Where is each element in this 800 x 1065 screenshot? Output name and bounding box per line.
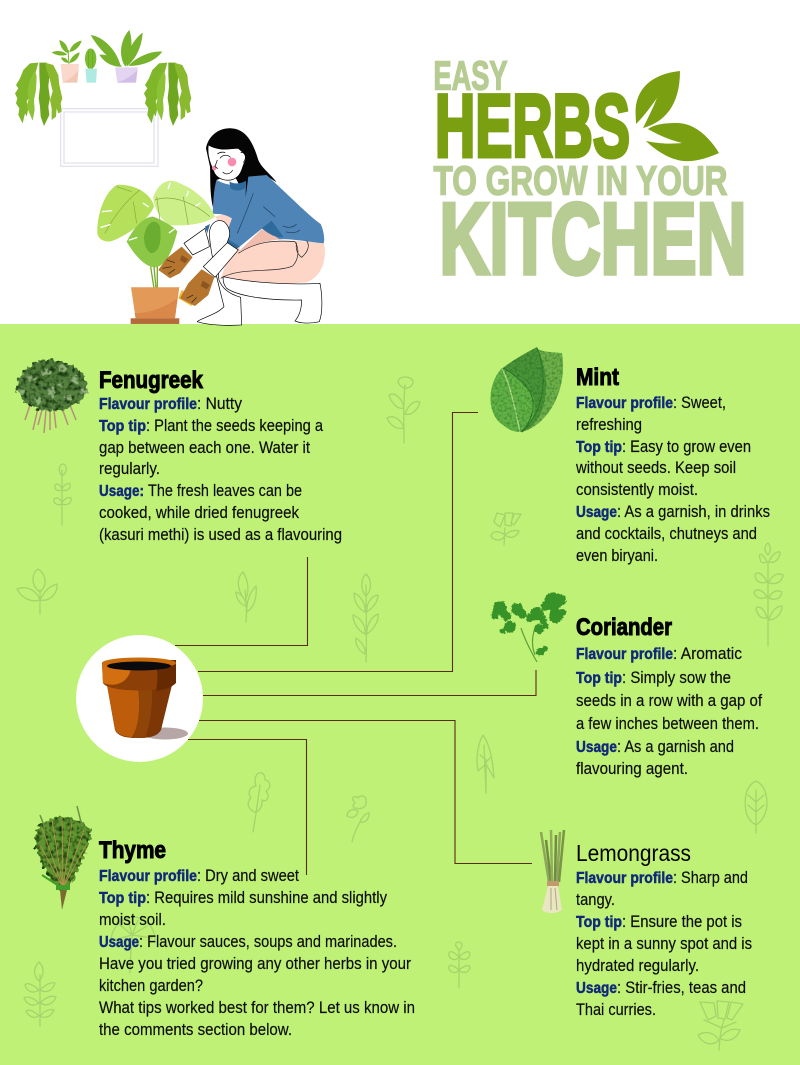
background plant doodles	[17, 377, 783, 1050]
text block: lemongrass: hydrated regularly.	[576, 957, 699, 975]
title	[434, 52, 746, 296]
text block: thyme and closing question: Top tip	[99, 890, 146, 907]
text block: fenugreek: Top tip	[99, 418, 146, 435]
text block: fenugreek: regularly.	[99, 460, 160, 478]
text block: thyme and closing question: : Flavour sauces, soups and marinades.	[139, 933, 397, 951]
text block: lemongrass: : Sharp and	[673, 869, 748, 887]
text block: coriander: flavouring agent.	[576, 760, 688, 778]
illustration: wall shelf, plants and gardening woman	[15, 30, 325, 325]
text block: lemongrass: Usage	[576, 980, 617, 997]
text block: mint: Flavour profile	[576, 395, 673, 412]
text block: thyme and closing question: : Requires mild sunshine and slightly	[146, 889, 388, 907]
text block: mint: refreshing	[576, 416, 642, 434]
woman: trouser outlines	[221, 241, 308, 278]
text block: lemongrass	[576, 840, 752, 1019]
hanging plant left	[15, 63, 62, 126]
text block: coriander: seeds in a row with a gap of	[576, 692, 762, 710]
text block: mint: without seeds. Keep soil	[575, 459, 736, 477]
icon: title leaves	[636, 71, 719, 161]
heading: coriander: Coriander	[576, 614, 672, 641]
text block: lemongrass: tangy.	[576, 891, 615, 909]
text block: thyme and closing question: Usage	[99, 934, 139, 951]
text block: lemongrass: : Stir-fries, teas and	[617, 979, 746, 997]
text block: lemongrass: kept in a sunny spot and is	[576, 935, 752, 953]
text block: coriander: : As a garnish and	[617, 738, 734, 756]
wall frame	[61, 109, 158, 166]
cactus in teal pot	[85, 48, 97, 83]
text block: lemongrass: Flavour profile	[576, 870, 673, 887]
heading: lemongrass: Lemongrass	[576, 840, 691, 866]
text block: coriander: Flavour profile	[576, 646, 673, 663]
text block: fenugreek: The fresh leaves can be	[148, 482, 302, 500]
herb image: coriander	[491, 593, 566, 662]
woman: pink clothing	[215, 214, 325, 284]
text block: thyme and closing question: kitchen garden?	[99, 977, 203, 995]
herb image: mint	[490, 347, 563, 432]
woman: legs	[184, 221, 322, 325]
small potted plant	[52, 40, 82, 83]
text block: mint: and cocktails, chutneys and	[576, 525, 757, 543]
text block: fenugreek	[99, 367, 342, 544]
text block: fenugreek: Flavour profile	[99, 396, 197, 413]
woman: hair	[206, 128, 277, 208]
text block: mint	[575, 364, 770, 565]
text block: coriander	[576, 614, 762, 778]
woman: facial features	[215, 152, 245, 174]
text block: lemongrass: Thai curries.	[576, 1001, 656, 1019]
text block: mint: : Sweet,	[673, 394, 726, 412]
text block: thyme and closing question	[99, 837, 415, 1039]
text block: mint: consistently moist.	[576, 481, 698, 499]
text block: thyme and closing question: : Dry and sweet	[197, 867, 299, 885]
text block: coriander: a few inches between them.	[576, 715, 759, 733]
text block: thyme and closing question: Have you tried growing any other herbs in your	[99, 955, 411, 973]
woman: sweater shadow and folds	[237, 193, 300, 237]
text block: thyme and closing question: What tips worked best for them? Let us know in	[99, 999, 415, 1017]
text block: mint: even biryani.	[576, 547, 658, 565]
heading: mint: Mint	[576, 364, 619, 391]
title: herbs: HERBS	[435, 76, 630, 176]
text block: fenugreek: gap between each one. Water it	[99, 439, 310, 457]
text block: mint: Top tip	[576, 439, 622, 456]
text block: fenugreek: : Plant the seeds keeping a	[146, 417, 324, 435]
herb image: thyme	[35, 806, 92, 910]
text block: thyme and closing question: the comments section below.	[99, 1021, 292, 1039]
woman: face	[208, 145, 246, 180]
text block: coriander: : Simply sow the	[622, 669, 731, 687]
heading: fenugreek: Fenugreek	[99, 367, 204, 394]
panel: green background	[0, 324, 800, 1065]
central pot in white circle	[76, 635, 203, 762]
text block: fenugreek: : Nutty	[197, 395, 243, 413]
text block: mint: Usage	[576, 504, 617, 521]
text block: mint: : Easy to grow even	[622, 438, 751, 456]
title: easy: EASY	[434, 52, 508, 98]
connector lines	[175, 412, 536, 875]
terracotta plant pot	[131, 287, 179, 324]
text block: fenugreek: Usage:	[99, 483, 144, 500]
text block: thyme and closing question: Flavour profile	[99, 868, 197, 885]
text block: coriander: Top tip	[576, 670, 622, 687]
hanging plant right	[144, 63, 191, 126]
woman: pink shadow	[239, 229, 284, 252]
text block: lemongrass: : Ensure the pot is	[622, 913, 742, 931]
woman: cheeks	[212, 158, 236, 170]
herb image: fenugreek	[17, 359, 88, 433]
text block: lemongrass: Top tip	[576, 914, 622, 931]
woman: sweater	[213, 175, 324, 249]
woman: collar and cuffs	[205, 181, 246, 250]
heading: thyme: Thyme	[99, 837, 166, 864]
herb image: lemongrass	[541, 830, 564, 913]
text block: coriander: : Aromatic	[673, 645, 742, 663]
monstera plant	[97, 181, 215, 288]
text block: thyme and closing question: moist soil.	[99, 911, 166, 929]
large potted plant	[91, 30, 162, 83]
text block: mint: : As a garnish, in drinks	[617, 503, 770, 521]
text block: fenugreek: cooked, while dried fenugreek	[99, 504, 300, 522]
text block: fenugreek: (kasuri methi) is used as a flavouring	[99, 526, 342, 544]
gardening gloves	[158, 247, 214, 306]
text block: coriander: Usage	[576, 739, 617, 756]
